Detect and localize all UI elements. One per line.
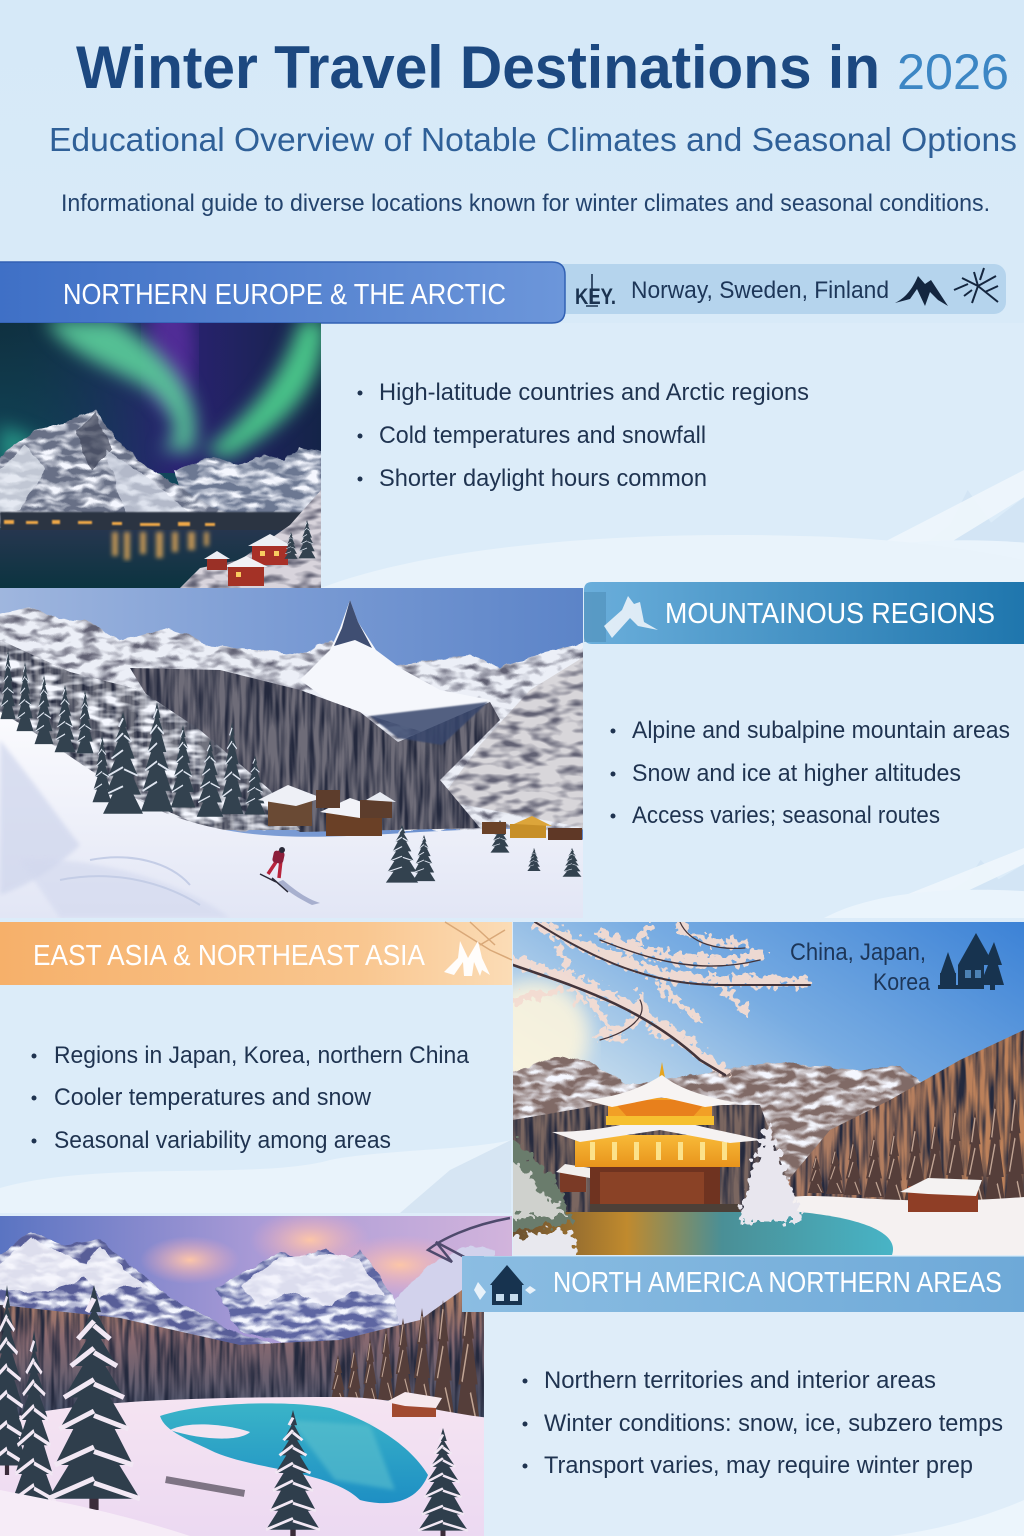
water xyxy=(513,1212,893,1255)
bullet list: mountainous regions: Snow and ice at higher altitudes xyxy=(632,760,961,787)
key pill: norway sweden finland: Norway, Sweden, Finland xyxy=(631,277,889,304)
bullet list: mountainous regions xyxy=(610,717,1010,829)
foreground drift xyxy=(0,1490,190,1536)
foreground pines xyxy=(0,1285,468,1536)
icon: house and pine xyxy=(938,933,1004,990)
forested slope xyxy=(788,1030,1024,1200)
header: northern europe and the arctic: NORTHERN EUROPE & THE ARCTIC xyxy=(63,279,506,311)
bullet list: north america: Northern territories and interior areas xyxy=(544,1367,936,1394)
bullet list: east asia: Cooler temperatures and snow xyxy=(54,1084,372,1111)
turquoise lake xyxy=(160,1403,428,1503)
panel: east asia text area xyxy=(0,985,511,1213)
treeline and village lights xyxy=(0,511,302,530)
image: alpine valley with skier xyxy=(0,588,595,918)
bullet list: east asia xyxy=(32,1042,470,1154)
image: aurora over mountain village xyxy=(0,323,321,588)
panel: northern europe text area xyxy=(321,323,1024,588)
forest xyxy=(0,1290,484,1418)
bullet list: east asia: Seasonal variability among areas xyxy=(54,1127,391,1154)
cabin xyxy=(900,1178,982,1212)
text: china japan korea xyxy=(791,942,930,990)
image: golden pagoda by frozen lake xyxy=(480,922,1024,1262)
title: 2026 xyxy=(897,44,1009,100)
lake xyxy=(0,530,282,588)
panel: mountainous regions text area xyxy=(583,644,1024,918)
header: mountainous regions: MOUNTAINOUS REGIONS xyxy=(665,598,995,630)
chalets xyxy=(258,785,582,840)
snow hills decoration xyxy=(764,470,1024,588)
bullet list: north america xyxy=(522,1367,1003,1479)
bullet list: northern europe: Shorter daylight hours common xyxy=(379,465,707,492)
mountains xyxy=(0,409,330,528)
aurora bands xyxy=(0,320,325,470)
right snowy slope xyxy=(448,658,583,828)
pagoda xyxy=(552,1062,762,1212)
mountains xyxy=(0,1232,495,1352)
icon: house xyxy=(474,1265,536,1305)
snow drift decoration xyxy=(0,1140,511,1213)
icon: key label: KEY. xyxy=(575,284,616,309)
bullet list: northern europe: Cold temperatures and snowfall xyxy=(379,422,706,449)
bullet list: north america: Transport varies, may require winter prep xyxy=(544,1452,973,1479)
ski slope xyxy=(0,712,583,918)
frosted trees xyxy=(505,1120,802,1262)
pine trees xyxy=(0,650,581,883)
cabin xyxy=(386,1392,442,1417)
key pill: norway sweden finland xyxy=(540,264,1006,314)
distant ridges xyxy=(0,606,595,830)
bullet list: northern europe: High-latitude countries and Arctic regions xyxy=(379,379,809,406)
header: northern europe and the arctic xyxy=(0,262,565,323)
header: mountainous regions xyxy=(584,582,1024,644)
bullet list: mountainous regions: Alpine and subalpine mountain areas xyxy=(632,717,1010,744)
icon: mountain xyxy=(895,276,948,306)
bullet list: mountainous regions: Access varies; seasonal routes xyxy=(632,802,940,829)
text: china japan korea: Korea xyxy=(873,969,931,996)
title: Winter Travel Destinations in xyxy=(76,34,880,101)
central peak xyxy=(300,600,490,740)
icon: snowflake branches xyxy=(954,268,998,303)
header: east asia and northeast asia xyxy=(0,922,512,985)
bullet list: east asia: Regions in Japan, Korea, northern China xyxy=(54,1042,470,1069)
icon: key label xyxy=(575,274,616,309)
left forest band xyxy=(0,640,300,830)
subtitle: Educational Overview of Notable Climates and Seasonal Options xyxy=(49,121,1017,158)
bullet list: north america: Winter conditions: snow, ice, subzero temps xyxy=(544,1410,1003,1437)
dark valley forest xyxy=(130,668,500,832)
snow ground xyxy=(0,1397,512,1536)
log xyxy=(165,1476,245,1497)
skier xyxy=(260,847,320,905)
distant mountains xyxy=(513,1056,921,1180)
snowy shore and cabins xyxy=(180,490,321,588)
header: north america northern areas xyxy=(462,1256,1024,1312)
frosted branches xyxy=(513,925,805,1072)
header: east asia and northeast asia: EAST ASIA & NORTHEAST ASIA xyxy=(33,940,426,972)
image: pink dawn mountain lake xyxy=(0,1210,512,1536)
icon: mountain peak xyxy=(604,596,658,638)
snowy shore xyxy=(790,1196,1024,1255)
icon: snowy trees xyxy=(444,941,490,976)
bullet list: northern europe xyxy=(358,379,809,492)
text: china japan korea: China, Japan, xyxy=(790,939,926,966)
bare branch xyxy=(428,1218,510,1262)
snow hills decoration xyxy=(824,848,1024,918)
panel: north america text area xyxy=(484,1312,1024,1536)
intro text: Informational guide to diverse locations known for winter climates and seasonal conditions. xyxy=(61,190,990,217)
